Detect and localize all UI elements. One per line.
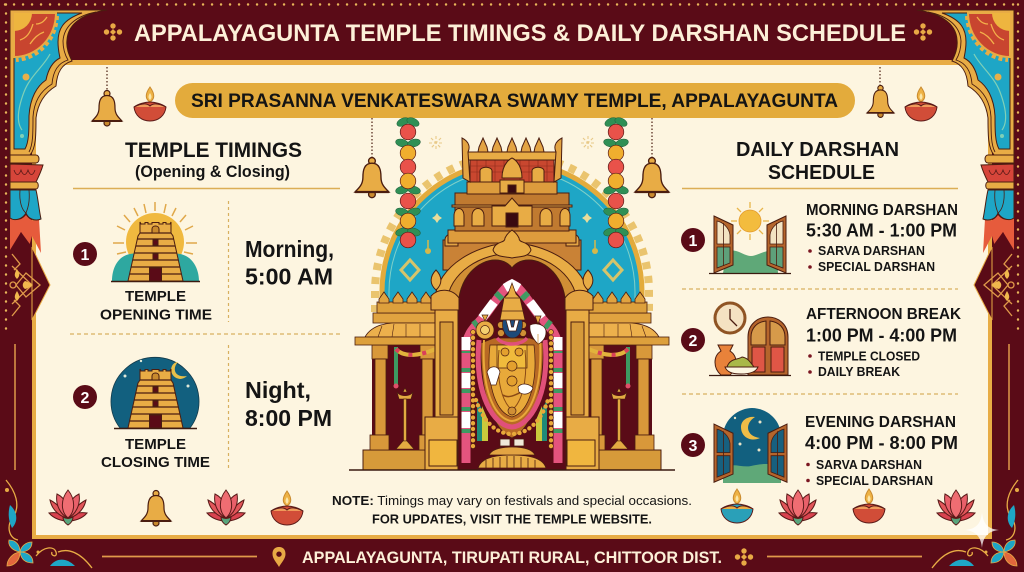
text: morning darshan: SPECIAL DARSHAN xyxy=(818,260,935,274)
number badge 3 xyxy=(681,433,705,457)
text: afternoon break: DAILY BREAK xyxy=(818,365,900,379)
dotted border xyxy=(5,4,1019,335)
number badge 1 xyxy=(681,228,705,252)
sparkles xyxy=(429,136,595,150)
central arch xyxy=(349,230,675,470)
icon: top right bell xyxy=(867,67,894,117)
left flower garland xyxy=(395,116,421,248)
subtitle pill xyxy=(175,83,855,118)
heading: daily darshan schedule xyxy=(736,138,899,184)
icon: map pin xyxy=(272,547,286,567)
label: closing time: TEMPLE xyxy=(125,436,186,453)
closing time value xyxy=(245,377,332,431)
text: afternoon break: TEMPLE CLOSED xyxy=(818,350,920,364)
icon: bottom bell xyxy=(141,490,171,526)
top-right corner ornament xyxy=(917,10,1019,568)
watermark sparkle xyxy=(965,512,999,548)
icon: footer flourish xyxy=(735,548,753,566)
outer bead garland xyxy=(476,400,548,434)
drapes xyxy=(477,400,547,441)
note: NOTE: Timings may vary on festivals and special occasions. xyxy=(332,493,692,508)
icon: bottom lotus 2 xyxy=(207,490,245,525)
subtitle pill: SRI PRASANNA VENKATESWARA SWAMY TEMPLE, APPALAYAGUNTA xyxy=(191,91,838,112)
number badge 2: 2 xyxy=(689,333,698,350)
heading: daily darshan schedule: DAILY DARSHAN xyxy=(736,138,899,161)
panel: temple timings xyxy=(70,139,340,471)
text: afternoon break xyxy=(806,306,962,379)
icon: bottom lotus 3 xyxy=(779,490,817,525)
icon: top left diya xyxy=(134,87,166,121)
text: morning darshan: MORNING DARSHAN xyxy=(806,202,958,219)
left hanging bell xyxy=(355,118,389,198)
left pavilion xyxy=(355,292,439,470)
note: FOR UPDATES, VISIT THE TEMPLE WEBSITE. xyxy=(372,512,652,526)
text: evening darshan: 4:00 PM - 8:00 PM xyxy=(805,433,958,453)
chakra and conch xyxy=(476,315,546,344)
number badge 1: 1 xyxy=(81,247,90,264)
number badge 2 xyxy=(681,328,705,352)
right flower garland xyxy=(603,116,629,248)
number badge 2 xyxy=(73,385,97,409)
opening time value: 5:00 AM xyxy=(245,264,333,290)
crown and face xyxy=(498,283,526,338)
text: evening darshan: SPECIAL DARSHAN xyxy=(816,474,933,488)
title text: APPALAYAGUNTA TEMPLE TIMINGS & DAILY DARSHAN SCHEDULE xyxy=(134,20,906,47)
opening time value: Morning, xyxy=(245,236,334,262)
icon: title flourish left xyxy=(104,23,122,41)
number badge 1: 1 xyxy=(689,233,698,250)
text: morning darshan xyxy=(806,202,958,274)
icon: top right diya xyxy=(905,87,937,121)
icon: temple at night xyxy=(111,357,199,428)
icon: bottom lotus 1 xyxy=(49,490,87,525)
text: evening darshan: SARVA DARSHAN xyxy=(816,458,922,472)
heading: daily darshan schedule: SCHEDULE xyxy=(768,161,875,184)
label: closing time xyxy=(101,436,210,471)
temple tower xyxy=(443,138,581,270)
body xyxy=(478,338,546,438)
icon: bottom diya left xyxy=(271,491,303,525)
text: evening darshan xyxy=(805,414,958,488)
icon: bottom lotus 4 xyxy=(937,490,975,525)
deity xyxy=(466,283,558,468)
text: afternoon break: AFTERNOON BREAK xyxy=(806,306,962,323)
top-left corner ornament xyxy=(5,10,107,568)
icon: clock, pot and closed door xyxy=(709,303,791,376)
opening time value xyxy=(245,236,334,290)
heading: temple timings: TEMPLE TIMINGS xyxy=(125,139,302,162)
flower garland xyxy=(466,284,558,463)
text: morning darshan: 5:30 AM - 1:00 PM xyxy=(806,220,957,240)
header band xyxy=(0,0,1024,60)
number badge 3: 3 xyxy=(689,438,698,455)
number badge 2: 2 xyxy=(81,390,90,407)
icon: evening window xyxy=(714,408,787,483)
right pavilion xyxy=(585,292,669,470)
closing time value: Night, xyxy=(245,377,311,403)
label: opening time: TEMPLE xyxy=(125,288,186,305)
label: closing time: CLOSING TIME xyxy=(101,454,210,471)
illustration: temple and deity xyxy=(349,116,675,470)
footer text: APPALAYAGUNTA, TIRUPATI RURAL, CHITTOOR DIST. xyxy=(302,548,722,567)
icon: bottom diya right xyxy=(853,489,885,523)
subheading: (Opening & Closing) xyxy=(135,163,290,181)
icon: morning window xyxy=(709,202,791,274)
text: afternoon break: 1:00 PM - 4:00 PM xyxy=(806,326,957,346)
hands xyxy=(487,367,533,394)
text: evening darshan: EVENING DARSHAN xyxy=(805,414,956,431)
panel: cream content area xyxy=(32,60,992,539)
icon: title flourish right xyxy=(914,23,932,41)
label: opening time xyxy=(100,288,212,324)
icon: top left bell xyxy=(92,67,122,126)
label: opening time: OPENING TIME xyxy=(100,306,212,324)
icon: bottom diya teal xyxy=(721,489,753,523)
panel: daily darshan schedule xyxy=(681,138,962,488)
title xyxy=(104,20,932,47)
footer location xyxy=(272,547,753,567)
temple halo xyxy=(375,155,649,312)
pedestal xyxy=(478,439,546,468)
closing time value: 8:00 PM xyxy=(245,405,332,431)
number badge 1 xyxy=(73,242,97,266)
bead strings xyxy=(473,332,551,447)
right hanging bell xyxy=(635,118,669,198)
text: morning darshan: SARVA DARSHAN xyxy=(818,244,925,258)
icon: temple at sunrise xyxy=(111,202,200,282)
note xyxy=(332,493,692,526)
